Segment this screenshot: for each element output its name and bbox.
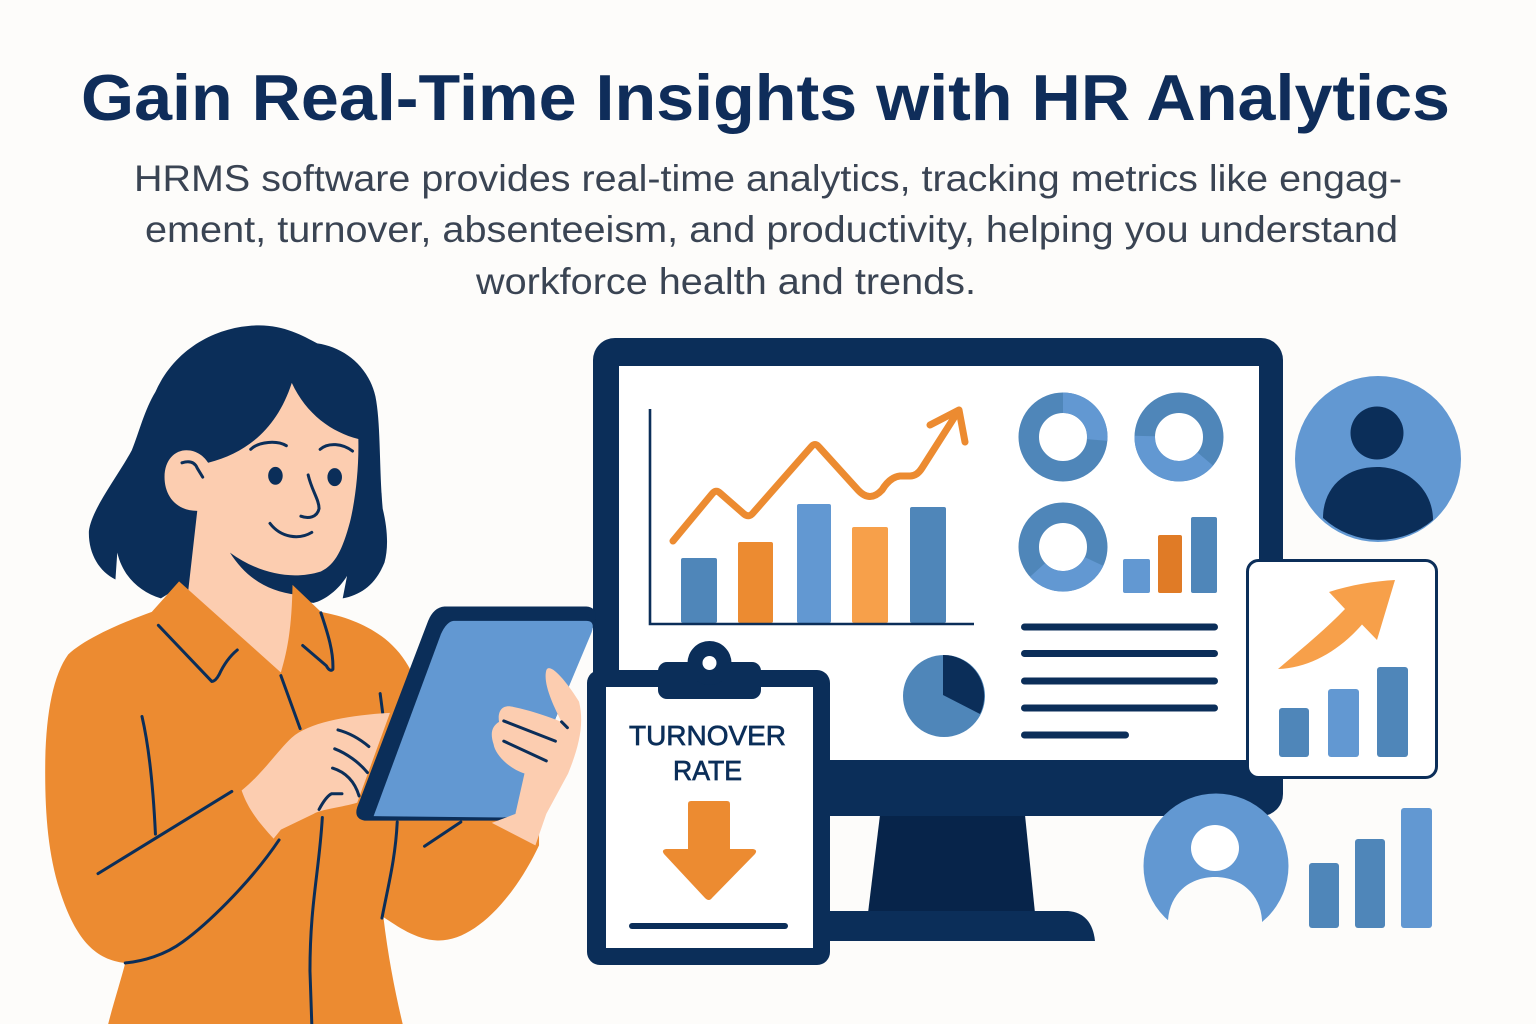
description text <box>134 158 1402 302</box>
bottom right bar chart <box>1309 808 1432 928</box>
pointing hand <box>242 713 390 839</box>
dashboard line and bar chart <box>650 409 974 624</box>
description text: workforce health and trends. <box>475 261 976 302</box>
trend arrow line <box>673 410 965 541</box>
monitor <box>593 338 1283 941</box>
growth bars <box>1279 667 1408 757</box>
avatar top right <box>1295 376 1461 542</box>
tablet <box>356 606 596 821</box>
monitor base <box>820 911 1095 941</box>
clipboard label: RATE <box>673 755 742 786</box>
face and neck <box>165 383 358 684</box>
description text: ement, turnover, absenteeism, and productivity, helping you understand <box>145 209 1398 250</box>
avatar bottom <box>1144 794 1288 950</box>
clipboard board <box>587 670 830 965</box>
clipboard clip <box>658 641 761 699</box>
chart bars <box>681 504 946 623</box>
hair <box>89 325 387 603</box>
orange shirt <box>45 581 539 1024</box>
clipboard line <box>629 923 788 929</box>
monitor frame <box>593 338 1283 816</box>
small bar chart <box>1123 517 1217 593</box>
monitor screen <box>619 366 1259 760</box>
down arrow <box>663 801 756 900</box>
title: Gain Real-Time Insights with HR Analytics <box>81 61 1450 134</box>
holding hand <box>492 668 581 845</box>
donut chart one <box>1029 403 1097 471</box>
description text: HRMS software provides real-time analytics, tracking metrics like engag- <box>134 158 1402 199</box>
growth arrow <box>1278 580 1395 669</box>
donut chart two <box>1145 403 1213 471</box>
clipboard paper <box>606 687 813 948</box>
growth card <box>1248 560 1436 778</box>
donut chart three <box>1029 513 1097 581</box>
woman holding tablet <box>45 325 596 1024</box>
clipboard label: TURNOVER <box>629 720 786 751</box>
monitor stand <box>868 815 1035 913</box>
clipboard turnover rate <box>587 641 830 965</box>
face details <box>182 442 353 537</box>
pie chart <box>903 655 985 737</box>
chart axes <box>650 409 974 624</box>
text lines on screen <box>1021 624 1218 738</box>
shirt lines <box>98 613 461 1024</box>
clipboard label <box>629 720 786 786</box>
